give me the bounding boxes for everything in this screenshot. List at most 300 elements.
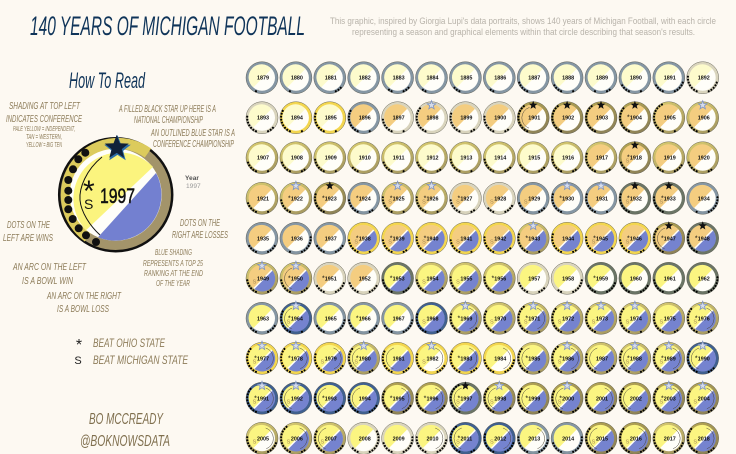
key: beat ohio state	[76, 336, 166, 354]
season 1898: 1898	[426, 116, 438, 122]
annotation: conference shading: PALE YELLOW = INDEPENDENT,	[13, 126, 75, 133]
season 1954: S	[422, 279, 426, 285]
season 1926	[412, 179, 451, 218]
season 2018: S	[693, 439, 697, 445]
season 2012: 2012	[494, 436, 506, 442]
season 1928	[480, 179, 519, 218]
season 1891	[649, 58, 688, 97]
season 1986: S	[558, 359, 562, 365]
season 1955: 1955	[460, 276, 472, 282]
legend example circle: 1997: *	[83, 175, 95, 208]
season 1924	[344, 179, 383, 218]
season 1909: 1909	[325, 156, 337, 162]
season 1926: S	[422, 199, 426, 205]
season 1973: 1973	[596, 316, 608, 322]
season 1995: *	[390, 395, 393, 402]
annotation: conference shading: TAN = WESTERN,	[26, 134, 62, 141]
season 1941: 1941	[460, 236, 472, 242]
season 1925: *	[390, 195, 393, 202]
season 1953	[378, 259, 417, 298]
season 1893: 1893	[257, 116, 269, 122]
season 1882: 1882	[359, 76, 371, 82]
season 1997	[446, 379, 485, 418]
credit: author: @BOKNOWSDATA	[80, 433, 170, 450]
season 1890: 1890	[630, 76, 642, 82]
season 1974	[615, 299, 654, 338]
annotation: bowl win arc: AN ARC ON THE LEFT	[12, 261, 87, 273]
season 1997: *	[458, 395, 461, 402]
season 1973: S	[592, 319, 596, 325]
season 2016: 2016	[630, 436, 642, 442]
season 1894	[276, 98, 315, 137]
season 1995	[378, 379, 417, 418]
annotation: losses dots	[172, 217, 228, 241]
season 1942: 1942	[494, 236, 506, 242]
season 1991	[242, 379, 282, 418]
tooltip: year: 1997	[186, 183, 201, 190]
season 1938: 1938	[359, 236, 371, 242]
season 1930: *	[559, 195, 562, 202]
annotation: wins dots: LEFT ARE WINS	[3, 232, 53, 244]
season 2006: 2006	[291, 436, 303, 442]
season 1978: *	[288, 355, 291, 362]
season 1888	[548, 58, 587, 97]
season 2001	[581, 379, 621, 418]
season 1936: 1936	[291, 236, 303, 242]
season 1925	[378, 179, 417, 218]
season 1940	[412, 219, 451, 258]
season 1895	[310, 98, 349, 137]
season 2015: S	[592, 439, 596, 445]
credit: author: BO MCCREADY	[89, 411, 164, 428]
season 1993: 1993	[325, 396, 337, 402]
season 1941	[446, 219, 485, 258]
season 1968: 1968	[426, 316, 438, 322]
season 1923: *	[322, 195, 325, 202]
season 1955	[446, 259, 485, 298]
season 1974: 1974	[630, 316, 642, 322]
season 1943: *	[525, 235, 528, 242]
legend example circle: 1997: 1997	[100, 185, 135, 208]
season 1897: 1897	[393, 116, 405, 122]
season 1900	[480, 98, 519, 137]
season 1982: S	[422, 359, 426, 365]
season 1954	[412, 259, 451, 298]
season 1944	[548, 219, 587, 258]
annotation: top 25 shading: RANKING AT THE END	[144, 268, 203, 278]
season 2000: *	[559, 395, 562, 402]
annotation: top 25 shading	[143, 247, 203, 288]
season 1993: *	[322, 395, 325, 402]
season 2000	[548, 379, 587, 418]
season 1896: 1896	[359, 116, 371, 122]
legend example circle: 1997: S	[84, 196, 93, 212]
season 1906	[683, 98, 722, 137]
season 1964: *	[288, 315, 291, 322]
season 1999: *	[525, 395, 528, 402]
season 1947	[649, 219, 688, 258]
season 1933	[649, 179, 688, 218]
season 1996: *	[424, 395, 427, 402]
season 1932: *	[627, 195, 630, 202]
tooltip: year: Year	[185, 175, 199, 182]
season 1945: S	[592, 239, 596, 245]
season 1979: 1979	[325, 356, 337, 362]
season 1961	[649, 259, 688, 298]
season 1908: 1908	[291, 156, 303, 162]
season 1962	[683, 259, 722, 298]
season 2001: 2001	[596, 396, 608, 402]
season 2002: 2002	[630, 396, 642, 402]
season 1939	[378, 219, 417, 258]
season 2006	[276, 419, 315, 454]
season 1970: 1970	[494, 316, 506, 322]
season 1985: *	[525, 355, 528, 362]
season 1953: *	[390, 275, 393, 282]
season 1940: S	[422, 239, 426, 245]
season 2004: S	[693, 399, 697, 405]
season 1918	[615, 138, 654, 177]
annotation: conference shading: INDICATES CONFERENCE	[6, 113, 83, 125]
season 1911: 1911	[393, 156, 404, 162]
season 1975	[649, 299, 688, 338]
season 1890	[615, 58, 654, 97]
season 1986: 1986	[562, 356, 574, 362]
season 1899	[446, 98, 485, 137]
season 1949: S	[253, 279, 257, 285]
annotation: wins dots: DOTS ON THE	[7, 219, 51, 231]
season 2012	[480, 419, 519, 454]
season 1969: *	[458, 315, 461, 322]
season 1883: 1883	[393, 76, 405, 82]
season 1915: 1915	[528, 156, 540, 162]
season 1976: *	[695, 315, 698, 322]
season 1885	[446, 58, 485, 97]
season 2007: 2007	[325, 436, 337, 442]
season 1983	[446, 339, 485, 378]
season 2000: 2000	[562, 396, 574, 402]
season 1968: S	[422, 319, 426, 325]
annotation: national championship star: NATIONAL CHAMPIONSHIP	[134, 114, 203, 126]
season 1929	[514, 179, 553, 218]
season 1934	[683, 179, 722, 218]
season 1976	[683, 299, 722, 338]
season 1937	[310, 219, 349, 258]
season 1893	[242, 98, 282, 137]
season 1957	[514, 259, 553, 298]
season 1946: 1946	[630, 236, 642, 242]
season 2005: 2005	[257, 436, 269, 442]
season 1980: 1980	[359, 356, 371, 362]
tooltip: year	[185, 175, 201, 190]
season 1942: S	[490, 239, 494, 245]
season 1999	[514, 379, 553, 418]
season 1918: 1918	[630, 156, 642, 162]
annotation: top 25 shading: BLUE SHADING	[155, 247, 192, 257]
season 1977	[242, 339, 282, 378]
annotation: losses dots: DOTS ON THE	[180, 217, 221, 229]
season 1952: 1952	[359, 276, 371, 282]
season 1979	[310, 339, 349, 378]
annotation: national championship star: A FILLED BLACK STAR UP HERE IS A	[118, 103, 216, 115]
season 1956	[480, 259, 519, 298]
season 2003: 2003	[664, 396, 676, 402]
season 2018	[683, 419, 722, 454]
season 2017	[649, 419, 688, 454]
season 1927: S	[456, 199, 460, 205]
season 1924: 1924	[359, 196, 371, 202]
annotation: bowl win arc: IS A BOWL WIN	[22, 275, 73, 287]
season 1992	[276, 379, 315, 418]
season 1946: *	[627, 235, 630, 242]
season 1999: 1999	[528, 396, 540, 402]
season 1882	[348, 62, 380, 94]
key: beat michigan state: BEAT MICHIGAN STATE	[93, 353, 189, 367]
season 2017: 2017	[664, 436, 676, 442]
season 2014	[548, 419, 587, 454]
season 1906: 1906	[698, 116, 710, 122]
season 1991: *	[254, 395, 257, 402]
season 1918: *	[627, 155, 630, 162]
season 1962: 1962	[698, 276, 710, 282]
season 1910	[344, 138, 383, 177]
season 1988: *	[627, 355, 630, 362]
season 1926: 1926	[426, 196, 438, 202]
season 1955: S	[456, 279, 460, 285]
season 2010: 2010	[426, 436, 438, 442]
season 1984: 1984	[494, 356, 506, 362]
season 1956: *	[491, 275, 494, 282]
season 1989: S	[659, 359, 663, 365]
annotation: conference championship star	[150, 127, 235, 150]
season 1930: 1930	[562, 196, 574, 202]
season 1947: 1947	[664, 236, 676, 242]
season 2002	[615, 379, 654, 418]
season 1949: 1949	[257, 276, 269, 282]
season 1997: S	[456, 399, 460, 405]
heading: how to read: How To Read	[69, 68, 145, 93]
season 2003	[649, 379, 688, 418]
season 1880	[276, 58, 315, 97]
season 1896	[344, 98, 383, 137]
season 1920: 1920	[698, 156, 710, 162]
season 1988: 1988	[630, 356, 642, 362]
season 2008: 2008	[359, 436, 371, 442]
season 2013: 2013	[528, 436, 540, 442]
season 1925: S	[388, 199, 392, 205]
season 1949	[242, 259, 282, 298]
season 1977: S	[253, 359, 257, 365]
season 1989: 1989	[664, 356, 676, 362]
season 1970	[480, 299, 519, 338]
season 2016	[615, 419, 654, 454]
season 1884: 1884	[426, 76, 438, 82]
season 1929: 1929	[528, 196, 540, 202]
season 1941: S	[456, 239, 460, 245]
season 2016: S	[626, 439, 630, 445]
season 1943: 1943	[528, 236, 540, 242]
season 1982: 1982	[426, 356, 438, 362]
season 1935	[242, 219, 282, 258]
season 1895: 1895	[325, 116, 337, 122]
season 1950: 1950	[291, 276, 303, 282]
key: beat ohio state: *	[76, 337, 82, 354]
season 1990: *	[695, 355, 698, 362]
season 1946: S	[626, 239, 630, 245]
season 1998: S	[490, 399, 494, 405]
annotation: conference shading: YELLOW = BIG TEN	[26, 142, 63, 149]
season 1972: 1972	[562, 316, 574, 322]
season 2007	[310, 419, 349, 454]
season 1972: S	[558, 319, 562, 325]
season 1965	[310, 299, 349, 338]
season 1911	[378, 138, 417, 177]
season 1919: 1919	[664, 156, 676, 162]
season 1880: 1880	[291, 76, 303, 82]
season 1897	[378, 98, 417, 137]
season 1959: *	[593, 275, 596, 282]
season 1917	[581, 138, 621, 177]
season 1923: 1923	[325, 196, 337, 202]
season 1998: 1998	[494, 396, 506, 402]
season 1991: 1991	[257, 396, 269, 402]
season 1983: *	[458, 355, 461, 362]
season 1910: 1910	[359, 156, 371, 162]
season 1952	[344, 259, 383, 298]
season 1960	[615, 259, 654, 298]
season 1939: 1939	[393, 236, 405, 242]
season 1948: 1948	[698, 236, 710, 242]
season 1879	[242, 58, 282, 97]
season 1925: 1925	[393, 196, 405, 202]
season 1919	[649, 138, 688, 177]
season 1964	[276, 299, 315, 338]
season 1970: S	[490, 319, 494, 325]
season 2008	[344, 419, 383, 454]
season 2015	[581, 419, 621, 454]
season 1985	[514, 339, 553, 378]
season 1950: *	[288, 275, 291, 282]
key: beat michigan state: S	[74, 355, 82, 367]
season 1971	[514, 299, 553, 338]
season 1993	[310, 379, 349, 418]
season 1907: 1907	[257, 156, 269, 162]
title: 140 YEARS OF MICHIGAN FOOTBALL	[30, 11, 305, 41]
season 1902: 1902	[562, 116, 574, 122]
season 1980	[344, 339, 383, 378]
season 1969	[446, 299, 485, 338]
season 2000: S	[558, 399, 562, 405]
season 1957: 1957	[528, 276, 540, 282]
season 1971: 1971	[528, 316, 540, 322]
season 1921: 1921	[257, 196, 269, 202]
season 2011	[446, 419, 485, 454]
season 1914: 1914	[494, 156, 506, 162]
season 2005: S	[253, 439, 257, 445]
season 1981	[378, 339, 417, 378]
season 1985: 1985	[528, 356, 540, 362]
season 1930	[548, 179, 587, 218]
season 2011: S	[456, 439, 460, 445]
season 1913	[446, 138, 485, 177]
season 1950	[276, 259, 315, 298]
season 1934: 1934	[698, 196, 710, 202]
annotation: wins dots	[3, 219, 53, 244]
season 1904: *	[627, 115, 630, 122]
season 1980: S	[354, 359, 358, 365]
season 1889: 1889	[596, 76, 608, 82]
season 1976: S	[693, 319, 697, 325]
description	[330, 15, 716, 37]
season 1971: S	[524, 319, 528, 325]
season 1966	[344, 299, 383, 338]
season 1951	[310, 259, 349, 298]
season 1963: 1963	[257, 316, 269, 322]
season 1988	[615, 339, 654, 378]
season 1926: *	[424, 195, 427, 202]
season 1933: S	[659, 199, 663, 205]
season 1892: 1892	[698, 76, 710, 82]
season 1913: 1913	[460, 156, 472, 162]
season 1978	[276, 339, 315, 378]
season 2018: 2018	[698, 436, 710, 442]
season 1905	[649, 98, 688, 137]
season 1987	[581, 339, 621, 378]
season 2004: 2004	[698, 396, 710, 402]
annotation: national championship star	[118, 103, 216, 126]
season 1974: S	[626, 319, 630, 325]
season 1981: 1981	[393, 356, 405, 362]
season 1927: 1927	[460, 196, 472, 202]
season 1992: 1992	[291, 396, 303, 402]
season 2015: 2015	[596, 436, 608, 442]
credit: author	[80, 411, 170, 450]
season 1904: 1904	[630, 116, 642, 122]
season 1987: 1987	[596, 356, 608, 362]
season 1938: *	[356, 235, 359, 242]
season 1900: 1900	[494, 116, 506, 122]
season 1963	[242, 299, 282, 338]
season 2004	[683, 379, 722, 418]
season 1969: 1969	[460, 316, 472, 322]
season 1980: *	[356, 355, 359, 362]
season 1989: *	[661, 355, 664, 362]
season 1886: 1886	[494, 76, 506, 82]
key: beat michigan state	[74, 353, 189, 367]
season 1935: 1935	[257, 236, 269, 242]
season 1976: 1976	[698, 316, 710, 322]
season 1992: S	[287, 399, 291, 405]
season 1931: 1931	[596, 196, 608, 202]
season 1912: 1912	[426, 156, 438, 162]
annotation: conference shading	[6, 100, 83, 149]
season 1945: 1945	[596, 236, 608, 242]
season 1979: S	[320, 359, 324, 365]
season 1964: 1964	[291, 316, 303, 322]
season 1951: *	[322, 275, 325, 282]
season 1958: 1958	[562, 276, 574, 282]
season 1953: 1953	[393, 276, 405, 282]
season 1968	[412, 299, 451, 338]
annotation: top 25 shading: OF THE YEAR	[156, 278, 190, 288]
season 1899: 1899	[460, 116, 472, 122]
season 1938: S	[354, 239, 358, 245]
season 1967	[378, 299, 417, 338]
season 1901	[514, 98, 553, 137]
annotation: bowl loss arc	[46, 290, 122, 315]
season 1927: *	[458, 195, 461, 202]
season 1894: 1894	[291, 116, 303, 122]
